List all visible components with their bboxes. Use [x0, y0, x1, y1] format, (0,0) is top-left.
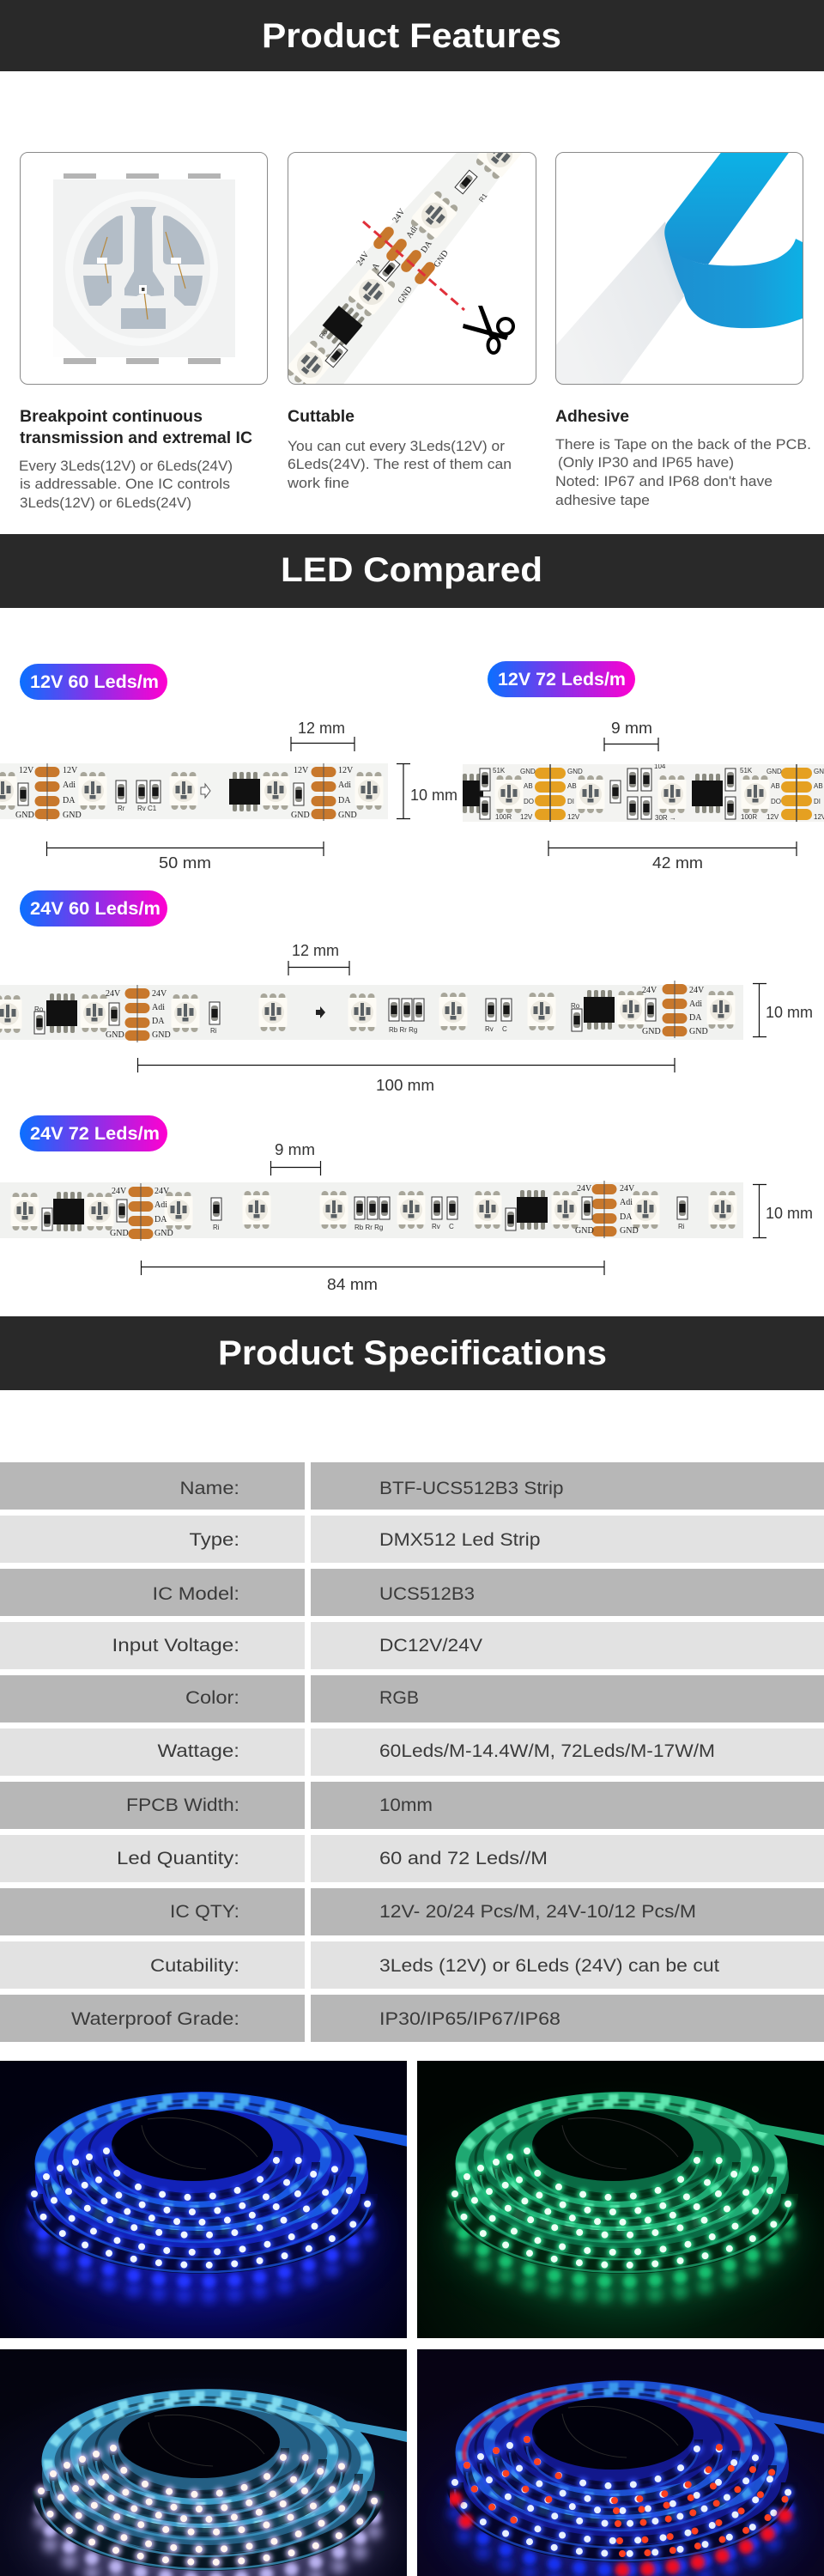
pad labels: DA — [419, 239, 434, 255]
text block: Adhesive: There is Tape on the back of the PCB. — [555, 437, 811, 453]
text block: Cuttable: Cuttable — [288, 408, 354, 426]
pad labels: Ri — [213, 1224, 220, 1231]
pad labels: 24V — [112, 1187, 127, 1196]
text block: Cuttable: You can cut every 3Leds(12V) or — [288, 439, 506, 454]
pad labels: A — [370, 261, 382, 272]
dimension: 12 mm pitch, 12V 60 — [291, 719, 354, 751]
text block: Cuttable: work fine — [287, 476, 349, 491]
heading: Product Features: Product Features — [262, 17, 561, 55]
icon: 5050 LED chip — [53, 173, 235, 364]
pad labels: 24V — [689, 986, 705, 995]
pad labels: Ro — [571, 1002, 580, 1010]
pad labels: DI — [814, 798, 821, 805]
row: FPCB Width: FPCB Width: — [126, 1795, 239, 1815]
pad labels: GND — [520, 768, 536, 775]
pad labels: 100R — [741, 813, 757, 821]
panel: adhesive tape — [554, 150, 807, 386]
pad labels: 12V — [338, 766, 354, 775]
row: IC QTY — [0, 1888, 824, 1935]
pad labels: GND — [689, 1027, 708, 1036]
row: Name: BTF-UCS512B3 Strip — [379, 1479, 563, 1498]
dimension: 9 mm pitch, 24V 72 — [270, 1140, 321, 1176]
photo: red and blue LED coil — [417, 2349, 824, 2576]
text block: Cuttable: 6Leds(24V). The rest of them can — [288, 457, 512, 472]
red LED segments — [455, 2391, 790, 2570]
dimension: 12 mm pitch, 24V 60 — [288, 941, 349, 975]
photo: white and cyan LED coil — [0, 2349, 419, 2576]
pad labels: 24V — [106, 989, 121, 999]
text block: Adhesive: Adhesive — [555, 408, 629, 426]
row: Name — [0, 1462, 824, 1510]
pad labels: Rv — [485, 1025, 494, 1033]
pad labels: R1 — [477, 191, 489, 204]
pad labels: GND — [642, 1027, 661, 1036]
pad labels: 100R — [495, 813, 512, 821]
pad labels: Ri — [678, 1223, 685, 1230]
row: Color — [0, 1675, 824, 1722]
pad labels: DA — [620, 1212, 633, 1222]
text block: Adhesive: Noted: IP67 and IP68 don't have — [555, 474, 772, 489]
pad labels: 24V — [391, 207, 408, 225]
pad labels: GND — [575, 1226, 594, 1236]
dimension: 100 mm — [137, 1058, 675, 1094]
badge: 12V 60 Leds/m: 12V 60 Leds/m — [30, 672, 159, 692]
pad labels: GND — [432, 249, 451, 270]
row: Led Quantity: Led Quantity: — [117, 1849, 239, 1868]
dimension: 9 mm pitch, 12V 72: 9 mm — [611, 719, 652, 737]
pad labels: DI — [567, 798, 574, 805]
pad labels: 12V — [19, 766, 34, 775]
strip: 12V 72 Leds/m — [452, 762, 824, 822]
heading: Product Specifications: Product Specifications — [218, 1334, 607, 1372]
pad labels: 12V — [567, 813, 580, 821]
pad labels: DA — [338, 796, 351, 805]
row: Waterproof Grade — [0, 1995, 824, 2042]
pad labels: 51K — [493, 767, 506, 775]
text block: Adhesive: (Only IP30 and IP65 have) — [558, 455, 734, 471]
dimension: 10 mm width, 24V 72: 10 mm — [766, 1204, 813, 1222]
text block: Breakpoint continuous transmission: Every 3Leds(12V) or 6Leds(24V) — [19, 459, 233, 474]
pad labels: DA — [152, 1017, 165, 1026]
pad labels — [34, 986, 708, 1040]
pad labels: 24V — [354, 250, 372, 268]
dimension: 10 mm width, 24V 60 — [753, 983, 813, 1037]
solder pads — [373, 227, 435, 284]
pad labels: 12V — [520, 813, 533, 821]
dimension: 50 mm — [46, 841, 324, 872]
pad labels: Adi — [338, 781, 351, 790]
row: Led Quantity — [0, 1835, 824, 1882]
row: Led Quantity: 60 and 72 Leds//M — [379, 1849, 548, 1868]
pad labels — [318, 191, 489, 340]
cut line — [363, 222, 464, 310]
row: IC Model — [0, 1569, 824, 1616]
blue tape band — [664, 150, 791, 264]
tape white side — [554, 222, 684, 386]
pad labels: GND — [106, 1030, 124, 1040]
pad labels: AB — [814, 782, 823, 790]
dimension: 42 mm — [548, 841, 797, 872]
dimension: 10 mm width, 24V 72 — [753, 1184, 813, 1238]
pad labels: Adi — [152, 1003, 165, 1012]
text block: Breakpoint continuous transmission: Breakpoint continuous — [20, 408, 203, 426]
strip: 24V 60 Leds/m — [0, 981, 743, 1042]
pad labels: GND — [291, 811, 310, 820]
pad labels: Adi — [689, 999, 702, 1009]
row: Type: Type: — [189, 1530, 239, 1550]
pad labels: 30R → — [655, 814, 676, 822]
pad labels: Ro — [34, 1005, 44, 1013]
row: Wattage: 60Leds/M-14.4W/M, 72Leds/M-17W/M — [379, 1741, 715, 1761]
pad labels: C — [502, 1025, 507, 1033]
badge: 12V 72 Leds/m: 12V 72 Leds/m — [498, 670, 626, 690]
heading: Product Specifications — [0, 1316, 824, 1390]
badge: 24V 72 Leds/m — [20, 1115, 167, 1151]
pad labels: GND — [567, 768, 583, 775]
pad labels: GND — [63, 811, 82, 820]
heading: LED Compared: LED Compared — [281, 551, 542, 589]
pad labels: 12V — [294, 766, 309, 775]
pad labels — [15, 766, 357, 820]
pad labels: DO — [524, 798, 534, 805]
row: Wattage: Wattage: — [158, 1741, 239, 1761]
pad labels — [493, 762, 824, 822]
pad labels: GND — [396, 285, 415, 306]
text block: Adhesive: adhesive tape — [555, 493, 650, 508]
dimension: 50 mm: 50 mm — [159, 854, 211, 872]
row: IC QTY: IC QTY: — [170, 1902, 239, 1922]
dimension: 84 mm: 84 mm — [327, 1275, 378, 1293]
pad labels: Rv C1 — [137, 805, 157, 812]
panel: cuttable strip — [288, 152, 536, 385]
pad labels: 24V — [642, 986, 657, 995]
text block: Cuttable — [287, 408, 512, 491]
strip: 12V 60 Leds/m — [0, 763, 388, 821]
icon: scissors — [463, 306, 513, 353]
strip diagonal — [288, 153, 500, 384]
pad labels: 12V — [63, 766, 78, 775]
dimension: 12 mm pitch, 24V 60: 12 mm — [292, 941, 339, 959]
pad labels: GND — [154, 1229, 173, 1238]
pad labels: 24V — [152, 989, 167, 999]
pad labels: 24V — [577, 1184, 592, 1194]
row: IC Model: UCS512B3 — [379, 1584, 475, 1604]
dimension: 10 mm width, 12V 60 — [397, 763, 457, 819]
row: Input Voltage: Input Voltage: — [112, 1636, 239, 1656]
pad labels: Rb Rr Rg — [389, 1026, 417, 1034]
blue tape curl — [665, 238, 807, 328]
text block: Breakpoint continuous transmission: 3Leds(12V) or 6Leds(24V) — [20, 495, 191, 511]
photo: green LED coil — [417, 2061, 824, 2338]
dimension: 84 mm — [141, 1261, 604, 1293]
dimension: 10 mm width, 12V 60: 10 mm — [410, 786, 457, 804]
pad labels: Ri — [210, 1027, 217, 1035]
dimension: 42 mm: 42 mm — [652, 854, 703, 872]
pad labels: GND — [766, 768, 782, 775]
pad labels: Ro — [318, 328, 330, 340]
pad labels: 12V — [766, 813, 779, 821]
photo: blue LED coil — [0, 2061, 412, 2338]
row: IC QTY: 12V- 20/24 Pcs/M, 24V-10/12 Pcs/M — [379, 1902, 696, 1922]
strip: 24V 72 Leds/m — [0, 1181, 743, 1241]
badge: 24V 60 Leds/m — [20, 890, 167, 927]
pad labels: AB — [771, 782, 780, 790]
pad labels: C — [449, 1223, 454, 1230]
pad labels: GND — [620, 1226, 639, 1236]
row: Waterproof Grade: Waterproof Grade: — [71, 2009, 239, 2029]
row: Cutability — [0, 1941, 824, 1989]
panel: LED chip closeup — [21, 153, 268, 385]
pad labels: Rb Rr Rg — [354, 1224, 383, 1231]
row: IC Model: IC Model: — [153, 1584, 239, 1604]
pad labels: DA — [154, 1215, 167, 1224]
pad labels: Adi — [63, 781, 76, 790]
badge: 24V 60 Leds/m: 24V 60 Leds/m — [30, 899, 161, 919]
badge: 12V 72 Leds/m — [488, 661, 635, 697]
text block: Breakpoint continuous transmission: transmission and extremal IC — [20, 429, 252, 447]
row: Color: RGB — [379, 1688, 419, 1708]
pad labels: AB — [524, 782, 533, 790]
pad labels: 24V — [154, 1187, 170, 1196]
dimension: 9 mm pitch, 12V 72 — [604, 719, 658, 751]
row: Type: DMX512 Led Strip — [379, 1530, 541, 1550]
badge: 12V 60 Leds/m — [20, 664, 167, 700]
row: Input Voltage — [0, 1622, 824, 1669]
icon: LEDs and IC — [288, 153, 522, 384]
dimension: 9 mm pitch, 24V 72: 9 mm — [275, 1140, 315, 1158]
text block: Breakpoint continuous transmission — [19, 408, 252, 511]
text block: Breakpoint continuous transmission: is addressable. One IC controls — [20, 477, 230, 492]
pad labels: GND — [152, 1030, 171, 1040]
row: FPCB Width: 10mm — [379, 1795, 433, 1815]
pad labels: 104 — [654, 762, 666, 770]
row: Cutability: 3Leds (12V) or 6Leds (24V) can be cut — [379, 1956, 719, 1976]
heading: Product Features — [0, 0, 824, 71]
pad labels: Adi — [154, 1200, 167, 1210]
text block: Adhesive — [555, 408, 811, 508]
pad labels: Adi — [620, 1198, 633, 1207]
row: Type — [0, 1516, 824, 1563]
pad labels: GND — [110, 1229, 129, 1238]
pad labels: DA — [689, 1013, 702, 1023]
badge: 24V 72 Leds/m: 24V 72 Leds/m — [30, 1124, 160, 1144]
dimension: 100 mm: 100 mm — [376, 1076, 434, 1094]
row: Wattage — [0, 1728, 824, 1776]
table: product specifications — [0, 1462, 824, 2042]
row: Name: Name: — [180, 1479, 239, 1498]
pad labels: Rr — [118, 805, 125, 812]
pad labels: 24V — [620, 1184, 635, 1194]
pad labels: 51K — [740, 767, 753, 775]
pad labels: DA — [63, 796, 76, 805]
dimension: 12 mm pitch, 12V 60: 12 mm — [298, 719, 345, 737]
row: Input Voltage: DC12V/24V — [379, 1636, 482, 1656]
pad labels: Adi — [404, 224, 420, 240]
pad labels: AB — [567, 782, 577, 790]
pad labels — [110, 1184, 685, 1238]
dimension: 10 mm width, 24V 60: 10 mm — [766, 1003, 813, 1021]
pad labels: GND — [338, 811, 357, 820]
row: Color: Color: — [185, 1688, 239, 1708]
pad labels: GND — [15, 811, 34, 820]
row: Waterproof Grade: IP30/IP65/IP67/IP68 — [379, 2009, 560, 2029]
pad labels: Rv — [432, 1223, 440, 1230]
row: FPCB Width — [0, 1782, 824, 1829]
pad labels: DO — [771, 798, 781, 805]
heading: LED Compared — [0, 534, 824, 608]
row: Cutability: Cutability: — [150, 1956, 239, 1976]
